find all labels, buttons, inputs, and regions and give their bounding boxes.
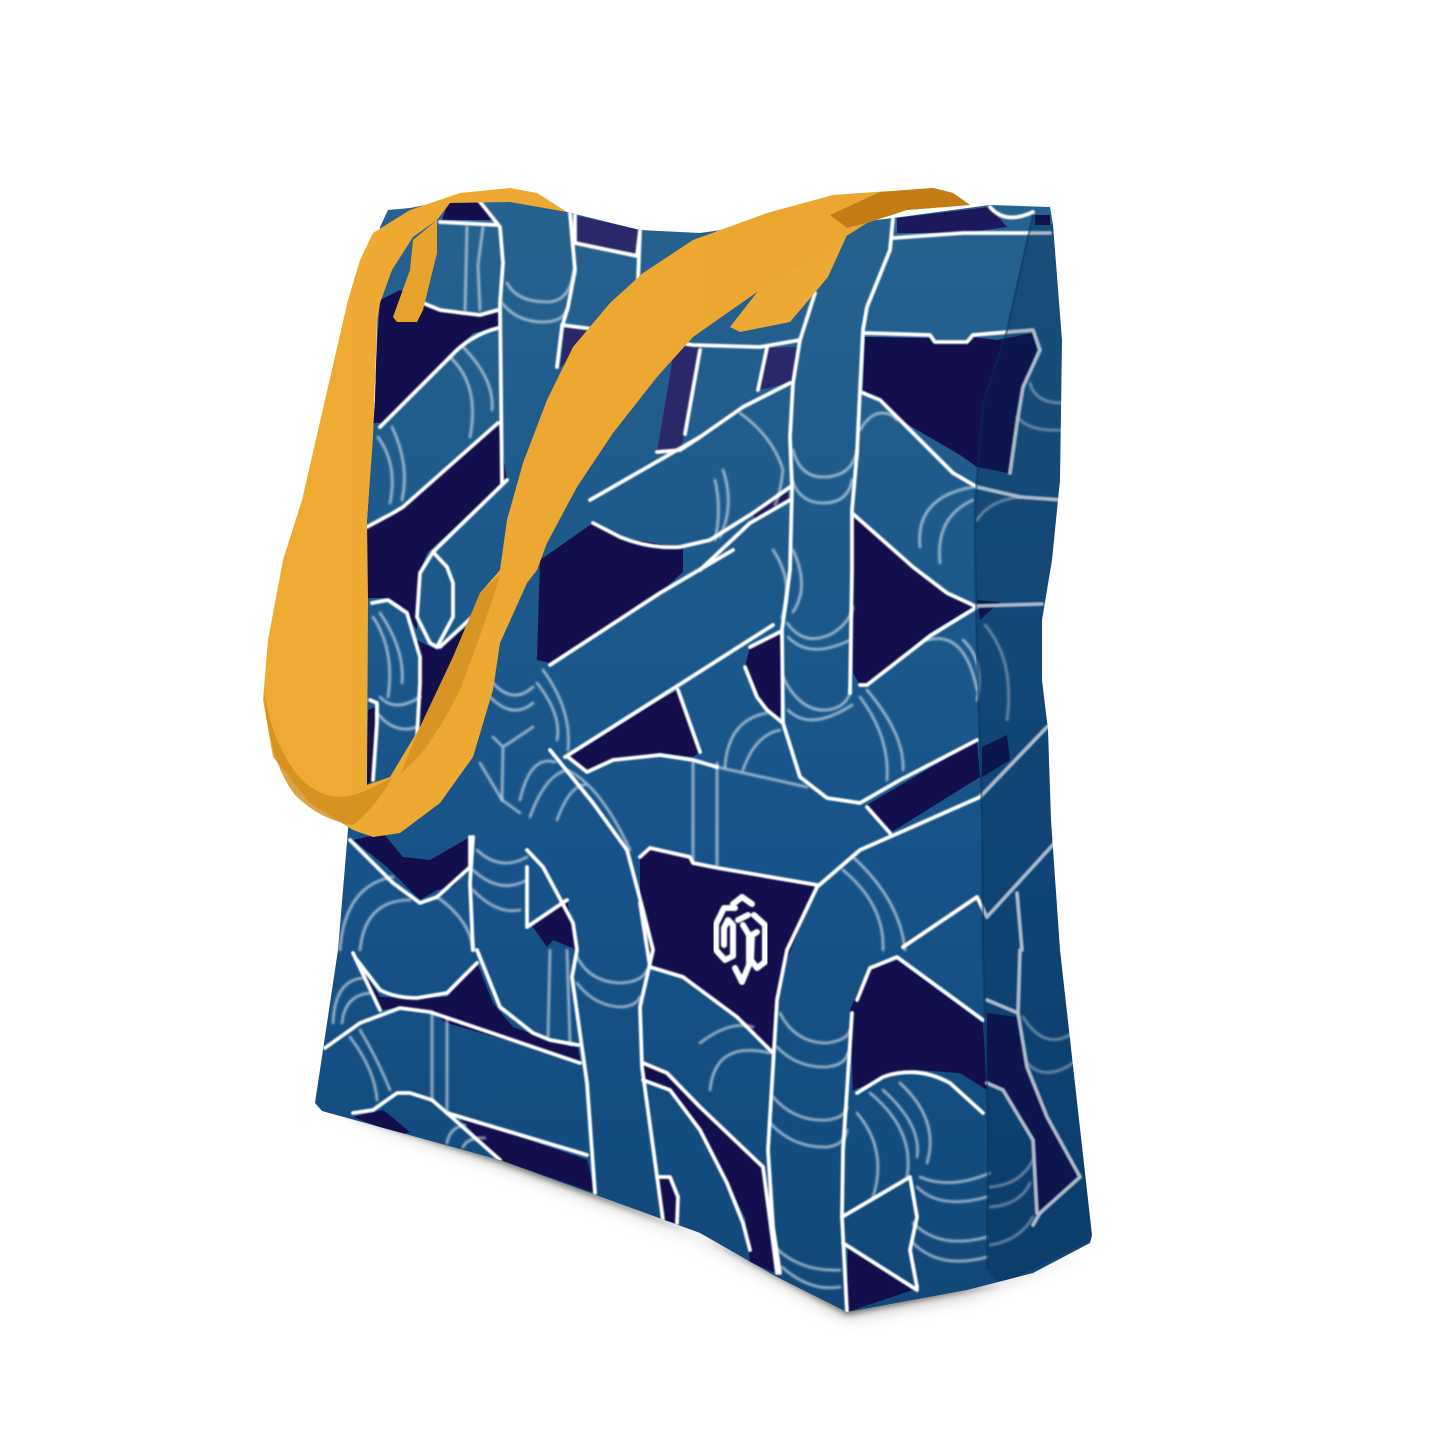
side fold crease xyxy=(975,215,1033,1270)
logo mark xyxy=(716,897,765,982)
pattern: navy panels xyxy=(353,198,1080,1312)
strap underside fold xyxy=(830,188,970,228)
pattern: pipe outlines xyxy=(325,198,1080,1312)
strap: main handle xyxy=(263,188,970,837)
tote bag illustration xyxy=(263,188,1092,1324)
bag body xyxy=(315,197,1092,1312)
pattern: translucent pipe rings xyxy=(333,227,1073,1288)
side panel shading xyxy=(975,215,1092,1285)
ground shadow xyxy=(330,1110,1085,1318)
strap lower fold shading xyxy=(264,690,392,825)
strap: rear tabs xyxy=(393,220,847,332)
